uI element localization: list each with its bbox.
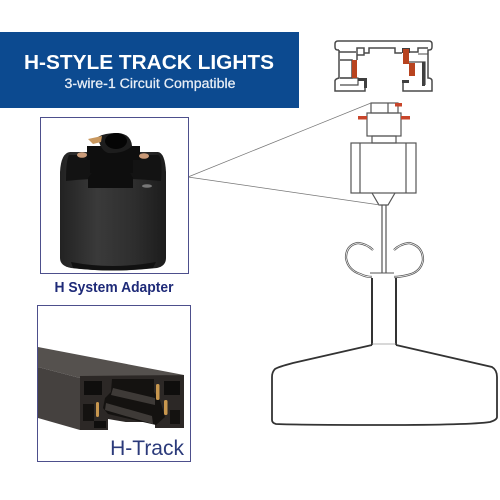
adapter photo [60,133,166,270]
adapter panel [40,118,188,296]
adapter technical drawing [351,103,416,273]
left hook [346,243,373,277]
title: H-STYLE TRACK LIGHTS [24,52,274,74]
adapter label: H System Adapter [54,280,174,296]
stem [372,278,396,345]
dark track blocks [358,48,425,88]
title banner [0,32,299,108]
copper contacts [352,49,415,78]
right hook [394,243,423,277]
collar [87,146,140,188]
subtitle: 3-wire-1 Circuit Compatible [64,76,236,91]
fixture body outline [272,243,497,425]
shade [272,345,497,425]
track label: H-Track [110,437,184,460]
callout lines [188,103,380,205]
track cross-section diagram [335,41,432,91]
red tabs [358,103,410,120]
H-track panel [38,306,190,462]
track photo [38,347,184,431]
